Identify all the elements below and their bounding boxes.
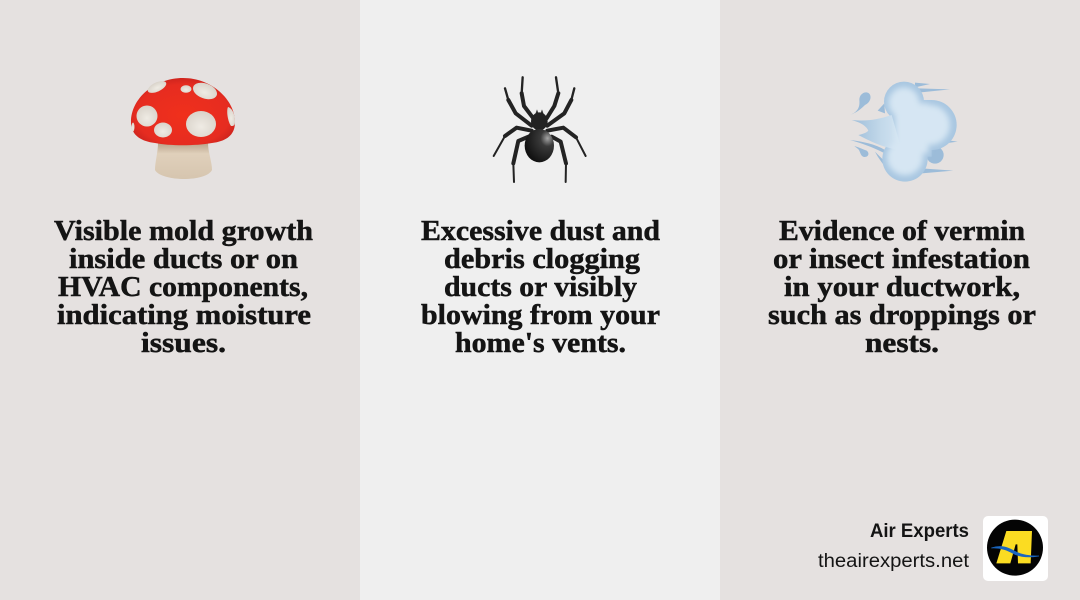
panel: dust [360, 0, 720, 600]
heading: mold text: inside ducts or on [69, 243, 298, 275]
heading: vermin text: such as droppings or [768, 299, 1036, 331]
panel: mold [0, 0, 360, 600]
heading: mold text: indicating moisture [57, 299, 311, 331]
heading: mold text: HVAC components, [58, 271, 308, 303]
heading: vermin text: or insect infestation [773, 243, 1030, 275]
heading: dust text: ducts or visibly [444, 271, 638, 303]
icon: spider [494, 77, 586, 182]
icon: mushroom [131, 78, 235, 179]
brand name: Air Experts [870, 521, 969, 542]
heading: dust text: debris clogging [444, 243, 641, 275]
heading: dust text [421, 215, 660, 359]
icon: dust cloud [850, 82, 958, 182]
heading: vermin text: in your ductwork, [784, 271, 1020, 303]
heading: vermin text [768, 215, 1036, 359]
heading: mold text: issues. [141, 327, 226, 359]
panel: vermin [720, 0, 1080, 600]
heading: mold text [54, 215, 313, 359]
heading: dust text: Excessive dust and [421, 215, 660, 247]
cloud body [852, 82, 957, 182]
logo [983, 516, 1048, 581]
heading: dust text: blowing from your [421, 299, 660, 331]
heading: dust text: home's vents. [455, 327, 626, 359]
heading: vermin text: nests. [865, 327, 939, 359]
heading: vermin text: Evidence of vermin [779, 215, 1025, 247]
heading: mold text: Visible mold growth [54, 215, 313, 247]
website: theairexperts.net [818, 551, 970, 572]
